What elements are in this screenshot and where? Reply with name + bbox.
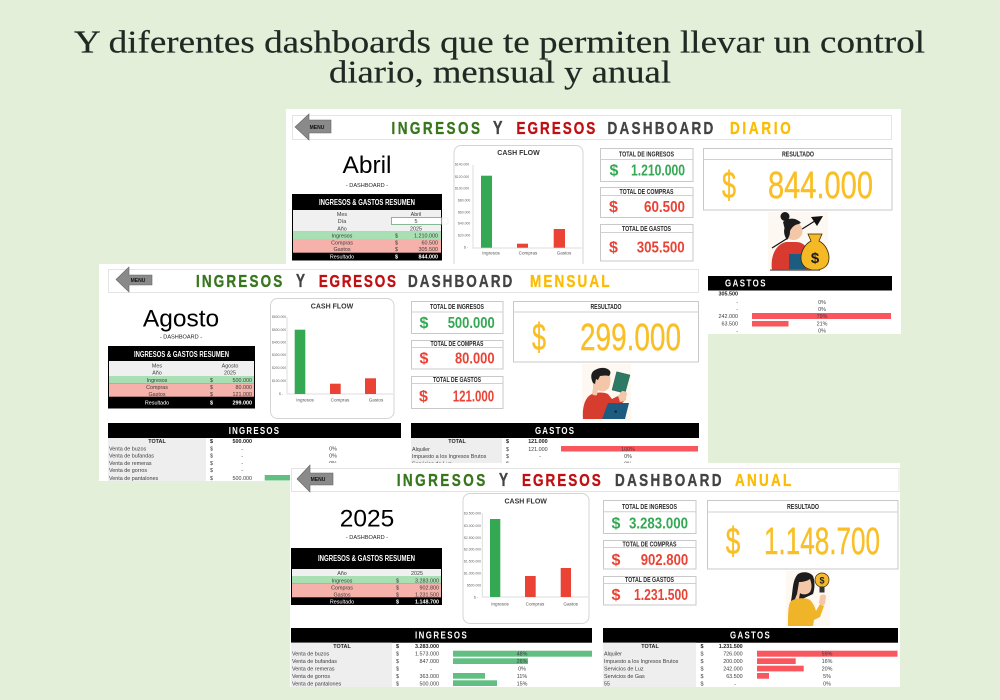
summary table: $ bbox=[396, 592, 399, 598]
section: gastos diario: - bbox=[736, 307, 738, 313]
summary table: Resultado bbox=[330, 600, 354, 606]
summary table: 902.800 bbox=[420, 585, 439, 591]
kpi: total de ingresos: 1.210.000 bbox=[631, 163, 685, 180]
chart: cash flow diario: Compras bbox=[519, 250, 538, 256]
chart: cash flow mensual: $ - bbox=[279, 392, 283, 396]
section: ingresos mensual: 0% bbox=[329, 447, 337, 453]
chart: cash flow diario: $ - bbox=[464, 246, 468, 250]
section: gastos anual: 16% bbox=[822, 659, 833, 665]
summary table: $ bbox=[210, 385, 213, 391]
month heading Agosto: - DASHBOARD - bbox=[160, 334, 202, 340]
section: ingresos anual: TOTAL bbox=[333, 644, 351, 650]
section: gastos anual: 5% bbox=[823, 674, 831, 680]
section: gastos mensual: $ bbox=[506, 447, 509, 453]
summary table: $ bbox=[210, 378, 213, 384]
summary table: Compras bbox=[331, 240, 353, 246]
kpi: total de gastos: 305.500 bbox=[637, 240, 685, 257]
kpi: total de ingresos: $ bbox=[420, 315, 428, 332]
chart: cash flow diario: $20.000 bbox=[458, 234, 470, 238]
section: ingresos mensual: 500.000 bbox=[232, 476, 252, 482]
month heading Agosto: Agosto bbox=[143, 305, 219, 332]
kpi: total de gastos: $ bbox=[612, 587, 620, 604]
section: ingresos anual: 48% bbox=[517, 652, 528, 658]
chart: cash flow anual bbox=[463, 494, 589, 624]
section: ingresos mensual: 500.000 bbox=[232, 439, 252, 445]
chart: cash flow mensual: $600.000 bbox=[272, 315, 286, 319]
panel: dashboard anual bbox=[290, 463, 900, 687]
summary table bbox=[291, 548, 442, 606]
title bar mensual: EGRESOS bbox=[319, 272, 396, 292]
title bar anual bbox=[292, 468, 899, 492]
chart: cash flow anual: $2.000.000 bbox=[464, 548, 481, 552]
summary table: $ bbox=[210, 400, 213, 406]
summary table: Ingresos bbox=[147, 378, 168, 384]
section: ingresos anual: $ bbox=[396, 674, 399, 680]
summary table: Gastos bbox=[333, 247, 351, 253]
section: gastos anual: 200.000 bbox=[723, 659, 743, 665]
chart: cash flow mensual: $200.000 bbox=[272, 366, 286, 370]
section: ingresos mensual bbox=[108, 423, 401, 482]
title: Y diferentes dashboards que te permiten llevar un control bbox=[74, 24, 925, 60]
kpi: resultado bbox=[707, 500, 898, 569]
summary table: $ bbox=[395, 247, 398, 253]
chart: cash flow diario: $120.000 bbox=[455, 175, 469, 179]
section: gastos anual: Alquiler bbox=[604, 652, 622, 658]
section: gastos mensual: - bbox=[539, 454, 541, 460]
chart: cash flow diario: $140.000 bbox=[455, 162, 469, 166]
month heading Abril: - DASHBOARD - bbox=[346, 183, 388, 189]
section: gastos anual: 55 bbox=[604, 681, 610, 687]
chart: cash flow anual: $2.500.000 bbox=[464, 536, 481, 540]
summary table: 1.210.000 bbox=[414, 234, 438, 240]
section: ingresos anual: Venta de pantalones bbox=[292, 681, 341, 687]
month heading Abril: Abril bbox=[342, 152, 392, 179]
section: gastos anual bbox=[603, 628, 898, 687]
icon: woman with money bag bbox=[768, 212, 829, 272]
section: ingresos mensual: $ bbox=[210, 439, 213, 445]
section: gastos mensual: TOTAL bbox=[448, 439, 466, 445]
chart: cash flow diario: Ingresos bbox=[482, 250, 501, 256]
icon: woman with idea bulb bbox=[786, 571, 830, 626]
chart: cash flow diario bbox=[454, 146, 583, 286]
kpi: total de gastos bbox=[411, 375, 503, 408]
chart: cash flow anual: Ingresos bbox=[491, 602, 510, 606]
section: gastos diario: - bbox=[736, 328, 738, 334]
section: ingresos anual: 847.000 bbox=[420, 659, 439, 665]
kpi: resultado: 844.000 bbox=[768, 165, 873, 207]
summary table: 305.500 bbox=[418, 247, 438, 253]
section: gastos diario: GASTOS bbox=[725, 278, 766, 289]
section: gastos anual: $ bbox=[700, 674, 704, 680]
section: gastos mensual: Servicios de Luz bbox=[412, 462, 452, 468]
kpi: total de ingresos bbox=[603, 500, 696, 534]
kpi: resultado: $ bbox=[532, 317, 546, 359]
section: ingresos mensual: Venta de gorros bbox=[109, 468, 147, 474]
title bar diario: DASHBOARD bbox=[608, 119, 713, 139]
summary table: Agosto bbox=[222, 364, 238, 370]
summary table: $ bbox=[395, 240, 398, 246]
summary table: Año bbox=[337, 571, 347, 577]
section: gastos mensual: 0% bbox=[624, 462, 632, 468]
chart: cash flow mensual: $400.000 bbox=[272, 340, 286, 344]
section: gastos anual: 59% bbox=[822, 652, 833, 658]
section: ingresos mensual: 0% bbox=[329, 461, 337, 467]
section: ingresos anual: $ bbox=[396, 652, 399, 658]
kpi: total de compras bbox=[603, 540, 696, 569]
kpi: resultado: RESULTADO bbox=[590, 302, 622, 311]
section: gastos diario: 63.500 bbox=[722, 322, 738, 328]
kpi: total de compras bbox=[411, 339, 503, 369]
icon: man with calculator bbox=[582, 364, 631, 421]
year heading 2025: 2025 bbox=[340, 506, 394, 533]
section: ingresos anual: 1.573.000 bbox=[415, 652, 439, 658]
summary table: Año bbox=[337, 226, 347, 232]
chart: cash flow anual: $3.500.000 bbox=[464, 512, 481, 516]
summary table bbox=[292, 194, 448, 260]
kpi: total de gastos: $ bbox=[419, 388, 428, 405]
summary table: $ bbox=[395, 254, 398, 260]
kpi: total de gastos: TOTAL DE GASTOS bbox=[622, 224, 671, 233]
section: gastos mensual: $ bbox=[506, 454, 509, 460]
summary table: 5 bbox=[414, 219, 418, 225]
kpi: total de gastos: $ bbox=[609, 240, 618, 257]
kpi: total de compras: TOTAL DE COMPRAS bbox=[620, 187, 674, 196]
summary table: 2025 bbox=[410, 226, 422, 232]
summary table: $ bbox=[395, 234, 398, 240]
section: gastos diario: 21% bbox=[817, 322, 828, 328]
kpi: total de compras: 902.800 bbox=[641, 552, 688, 569]
kpi: resultado bbox=[513, 302, 699, 362]
section: gastos diario: - bbox=[736, 300, 738, 306]
panel: dashboard mensual bbox=[99, 264, 708, 482]
title bar anual: EGRESOS bbox=[522, 471, 601, 491]
kpi: total de gastos bbox=[600, 224, 693, 261]
kpi: total de compras: $ bbox=[612, 552, 620, 569]
title bar diario: INGRESOS bbox=[392, 119, 480, 139]
chart: cash flow mensual: $100.000 bbox=[272, 379, 286, 383]
summary table: $ bbox=[396, 585, 399, 591]
summary table: Compras bbox=[146, 385, 168, 391]
section: ingresos anual: 363.000 bbox=[420, 674, 439, 680]
kpi: total de gastos: TOTAL DE GASTOS bbox=[625, 575, 674, 584]
section: gastos anual: TOTAL bbox=[641, 644, 659, 650]
section: gastos anual: 726.000 bbox=[723, 652, 743, 658]
icon: woman with money bag: $ bbox=[811, 250, 820, 267]
title bar diario: Y bbox=[493, 118, 502, 138]
section: ingresos mensual: $ bbox=[210, 476, 213, 482]
chart: cash flow mensual: $500.000 bbox=[272, 328, 286, 332]
kpi: total de compras: 80.000 bbox=[455, 351, 495, 368]
title bbox=[74, 24, 925, 90]
summary table: INGRESOS & GASTOS RESUMEN bbox=[318, 554, 415, 563]
section: ingresos anual: Venta de buzos bbox=[292, 652, 329, 658]
summary table: 1.148.700 bbox=[415, 600, 439, 606]
section: gastos mensual: 0% bbox=[624, 454, 632, 460]
section: ingresos anual: 500.000 bbox=[420, 681, 439, 687]
summary table: Ingresos bbox=[332, 234, 353, 240]
kpi: total de ingresos: 500.000 bbox=[448, 315, 495, 332]
kpi: resultado bbox=[703, 148, 892, 210]
section: ingresos anual: 3.283.000 bbox=[415, 644, 439, 650]
section: ingresos mensual: $ bbox=[210, 454, 213, 460]
kpi: total de ingresos: $ bbox=[612, 515, 620, 532]
section: gastos diario: 242.000 bbox=[718, 314, 738, 320]
section: gastos mensual: Impuesto a los Ingresos Brutos bbox=[412, 454, 487, 460]
summary table: INGRESOS & GASTOS RESUMEN bbox=[134, 350, 229, 359]
summary table bbox=[108, 346, 255, 408]
chart: cash flow mensual: Compras bbox=[331, 398, 350, 402]
summary table: 3.283.000 bbox=[415, 578, 439, 584]
section: ingresos anual: Venta de gorros bbox=[292, 674, 330, 680]
icon: menu arrow bbox=[116, 267, 152, 292]
summary table: Día bbox=[338, 219, 346, 225]
section: gastos mensual: $ bbox=[506, 439, 509, 445]
section: ingresos mensual: $ bbox=[210, 461, 213, 467]
chart: cash flow anual: $1.000.000 bbox=[464, 572, 481, 576]
kpi: total de compras: TOTAL DE COMPRAS bbox=[430, 339, 484, 348]
kpi: total de gastos: 121.000 bbox=[453, 388, 494, 405]
year heading 2025: - DASHBOARD - bbox=[346, 535, 388, 541]
section: gastos anual: 242.000 bbox=[723, 666, 743, 672]
kpi: total de gastos bbox=[603, 575, 696, 605]
kpi: total de compras: $ bbox=[420, 351, 428, 368]
kpi: resultado: $ bbox=[726, 521, 740, 563]
section: ingresos anual: Venta de remeras bbox=[292, 666, 335, 672]
section: gastos mensual: Alquiler bbox=[412, 447, 430, 453]
section: gastos anual: $ bbox=[700, 659, 704, 665]
section: gastos anual: $ bbox=[700, 666, 704, 672]
section: ingresos anual: 11% bbox=[517, 674, 527, 680]
kpi: total de compras bbox=[600, 187, 693, 218]
kpi: resultado: RESULTADO bbox=[787, 502, 819, 511]
title bar mensual: INGRESOS bbox=[196, 272, 282, 292]
chart: cash flow mensual bbox=[270, 298, 394, 418]
chart: cash flow diario: $60.000 bbox=[458, 210, 470, 214]
title: diario, mensual y anual bbox=[329, 54, 671, 90]
summary table: Mes bbox=[337, 212, 347, 218]
chart: cash flow anual: $500.000 bbox=[467, 584, 481, 588]
summary table: 1.231.500 bbox=[415, 592, 439, 598]
section: ingresos mensual: 0% bbox=[329, 454, 337, 460]
section: ingresos anual: INGRESOS bbox=[415, 629, 467, 641]
summary table: Resultado bbox=[145, 400, 169, 406]
section: ingresos anual: $ bbox=[396, 666, 399, 672]
section: ingresos anual: $ bbox=[396, 681, 399, 687]
kpi: total de ingresos bbox=[600, 148, 693, 182]
chart: cash flow mensual: Ingresos bbox=[296, 398, 315, 402]
summary table: $ bbox=[396, 578, 399, 584]
section: gastos mensual: 121.000 bbox=[528, 447, 548, 453]
kpi: resultado: 1.148.700 bbox=[764, 521, 880, 563]
kpi: total de ingresos: 3.283.000 bbox=[629, 515, 688, 532]
section: gastos anual: 20% bbox=[822, 666, 833, 672]
section: gastos anual: $ bbox=[700, 681, 704, 687]
title bar anual: Y bbox=[499, 470, 508, 490]
chart: cash flow anual: Gastos bbox=[563, 602, 579, 606]
section: gastos diario: 0% bbox=[818, 328, 826, 334]
chart: cash flow mensual: CASH FLOW bbox=[311, 304, 354, 311]
section: gastos anual: Servicios de Luz bbox=[604, 666, 644, 672]
section: ingresos mensual: - bbox=[241, 454, 243, 460]
section: gastos mensual bbox=[411, 423, 699, 468]
icon: menu arrow: MENU bbox=[131, 278, 146, 284]
section: gastos anual: $ bbox=[700, 652, 704, 658]
title bar anual: DASHBOARD bbox=[615, 471, 722, 491]
icon: menu arrow: MENU bbox=[311, 477, 326, 483]
section: gastos anual: GASTOS bbox=[730, 629, 770, 641]
title bar mensual: MENSUAL bbox=[530, 272, 610, 292]
kpi: total de ingresos: TOTAL DE INGRESOS bbox=[622, 502, 677, 511]
section: gastos diario: 305.500 bbox=[718, 292, 738, 298]
section: ingresos anual: Venta de bufandas bbox=[292, 659, 337, 665]
section: gastos anual: 63.500 bbox=[726, 674, 743, 680]
section: ingresos anual: $ bbox=[396, 659, 399, 665]
section: ingresos mensual: $ bbox=[210, 468, 213, 474]
title bar mensual bbox=[108, 270, 698, 292]
section: ingresos mensual: Venta de buzos bbox=[109, 447, 146, 453]
icon: woman with idea bulb: $ bbox=[819, 576, 825, 586]
section: ingresos mensual: - bbox=[241, 468, 243, 474]
section: ingresos mensual: Venta de remeras bbox=[109, 461, 152, 467]
section: gastos anual: 0% bbox=[823, 681, 831, 687]
chart: cash flow diario: CASH FLOW bbox=[497, 150, 540, 157]
chart: cash flow diario: $40.000 bbox=[458, 222, 470, 226]
summary table: Resultado bbox=[330, 254, 354, 260]
chart: cash flow diario: $100.000 bbox=[455, 186, 469, 190]
section: gastos diario: 79% bbox=[817, 314, 828, 320]
section: gastos anual: $ bbox=[700, 644, 704, 650]
section: ingresos mensual: $ bbox=[210, 447, 213, 453]
summary table: Gastos bbox=[148, 392, 166, 398]
icon: menu arrow bbox=[295, 114, 331, 140]
section: gastos anual: - bbox=[734, 681, 736, 687]
section: gastos mensual: $ bbox=[506, 462, 509, 468]
section: gastos anual: 1.231.500 bbox=[719, 644, 743, 650]
section: gastos anual: Impuesto a los Ingresos Brutos bbox=[604, 659, 679, 665]
section: ingresos anual bbox=[291, 628, 592, 687]
section: ingresos anual: 26% bbox=[517, 659, 528, 665]
section: ingresos mensual: - bbox=[241, 447, 243, 453]
summary table: 60.500 bbox=[422, 240, 438, 246]
icon: menu arrow bbox=[297, 465, 333, 492]
kpi: resultado: RESULTADO bbox=[782, 150, 814, 158]
summary table: 299.000 bbox=[232, 400, 252, 406]
section: gastos diario bbox=[708, 276, 892, 334]
chart: cash flow mensual: Gastos bbox=[369, 398, 384, 402]
kpi: total de compras: $ bbox=[609, 199, 618, 216]
section: gastos mensual: 121.000 bbox=[528, 439, 548, 445]
chart: cash flow anual: Compras bbox=[526, 602, 545, 606]
chart: cash flow anual: $3.000.000 bbox=[464, 524, 481, 528]
kpi: total de ingresos bbox=[411, 302, 503, 334]
summary table: $ bbox=[210, 392, 213, 398]
section: ingresos anual: 0% bbox=[518, 666, 526, 672]
kpi: total de compras: TOTAL DE COMPRAS bbox=[622, 540, 676, 549]
section: ingresos anual: - bbox=[430, 666, 432, 672]
kpi: resultado: $ bbox=[722, 165, 736, 207]
chart: cash flow diario: $80.000 bbox=[458, 198, 470, 202]
title bar mensual: Y bbox=[296, 271, 305, 291]
summary table: 80.000 bbox=[236, 385, 252, 391]
summary table: Abril bbox=[411, 212, 421, 218]
summary table: 500.000 bbox=[232, 378, 252, 384]
section: gastos diario: 0% bbox=[818, 307, 826, 313]
title bar anual: ANUAL bbox=[735, 471, 791, 491]
summary table: Año bbox=[152, 370, 162, 376]
section: ingresos mensual: Venta de bufandas bbox=[109, 454, 154, 460]
title bar diario: DIARIO bbox=[730, 119, 791, 139]
summary table: 844.000 bbox=[418, 254, 438, 260]
title bar anual: INGRESOS bbox=[397, 471, 485, 491]
kpi: total de gastos: TOTAL DE GASTOS bbox=[433, 375, 481, 384]
summary table: Compras bbox=[331, 585, 353, 591]
section: gastos mensual: GASTOS bbox=[535, 425, 574, 436]
kpi: total de ingresos: $ bbox=[610, 163, 618, 180]
title bar diario bbox=[292, 116, 892, 140]
icon: menu arrow: MENU bbox=[310, 125, 325, 131]
summary table: Gastos bbox=[333, 592, 351, 598]
summary table: Ingresos bbox=[332, 578, 353, 584]
section: gastos diario: 0% bbox=[818, 300, 826, 306]
summary table: 121.000 bbox=[232, 392, 252, 398]
summary table: $ bbox=[396, 600, 399, 606]
section: ingresos mensual: - bbox=[241, 461, 243, 467]
section: ingresos mensual: TOTAL bbox=[148, 439, 166, 445]
kpi: total de compras: 60.500 bbox=[644, 199, 685, 216]
kpi: resultado: 299.000 bbox=[580, 317, 681, 359]
section: ingresos mensual: Venta de pantalones bbox=[109, 476, 158, 482]
summary table: 2025 bbox=[411, 571, 423, 577]
title bar mensual: DASHBOARD bbox=[408, 272, 512, 292]
chart: cash flow diario: Gastos bbox=[557, 250, 572, 256]
section: gastos mensual: 100% bbox=[621, 447, 635, 453]
kpi: total de ingresos: TOTAL DE INGRESOS bbox=[619, 150, 674, 158]
chart: cash flow anual: $ - bbox=[474, 596, 478, 600]
section: ingresos anual: $ bbox=[396, 644, 399, 650]
chart: cash flow anual: $1.500.000 bbox=[464, 560, 481, 564]
section: gastos anual: Servicios de Gas bbox=[604, 674, 645, 680]
section: ingresos mensual: INGRESOS bbox=[229, 425, 279, 436]
panel: dashboard diario bbox=[286, 109, 901, 334]
summary table: INGRESOS & GASTOS RESUMEN bbox=[319, 198, 415, 207]
summary table: Mes bbox=[152, 364, 162, 370]
chart: cash flow mensual: $300.000 bbox=[272, 353, 286, 357]
summary table: 2025 bbox=[224, 370, 236, 376]
title bar diario: EGRESOS bbox=[516, 119, 595, 139]
kpi: total de gastos: 1.231.500 bbox=[634, 587, 688, 604]
chart: cash flow anual: CASH FLOW bbox=[505, 499, 547, 506]
kpi: total de ingresos: TOTAL DE INGRESOS bbox=[430, 302, 484, 311]
section: ingresos anual: 15% bbox=[517, 681, 528, 687]
